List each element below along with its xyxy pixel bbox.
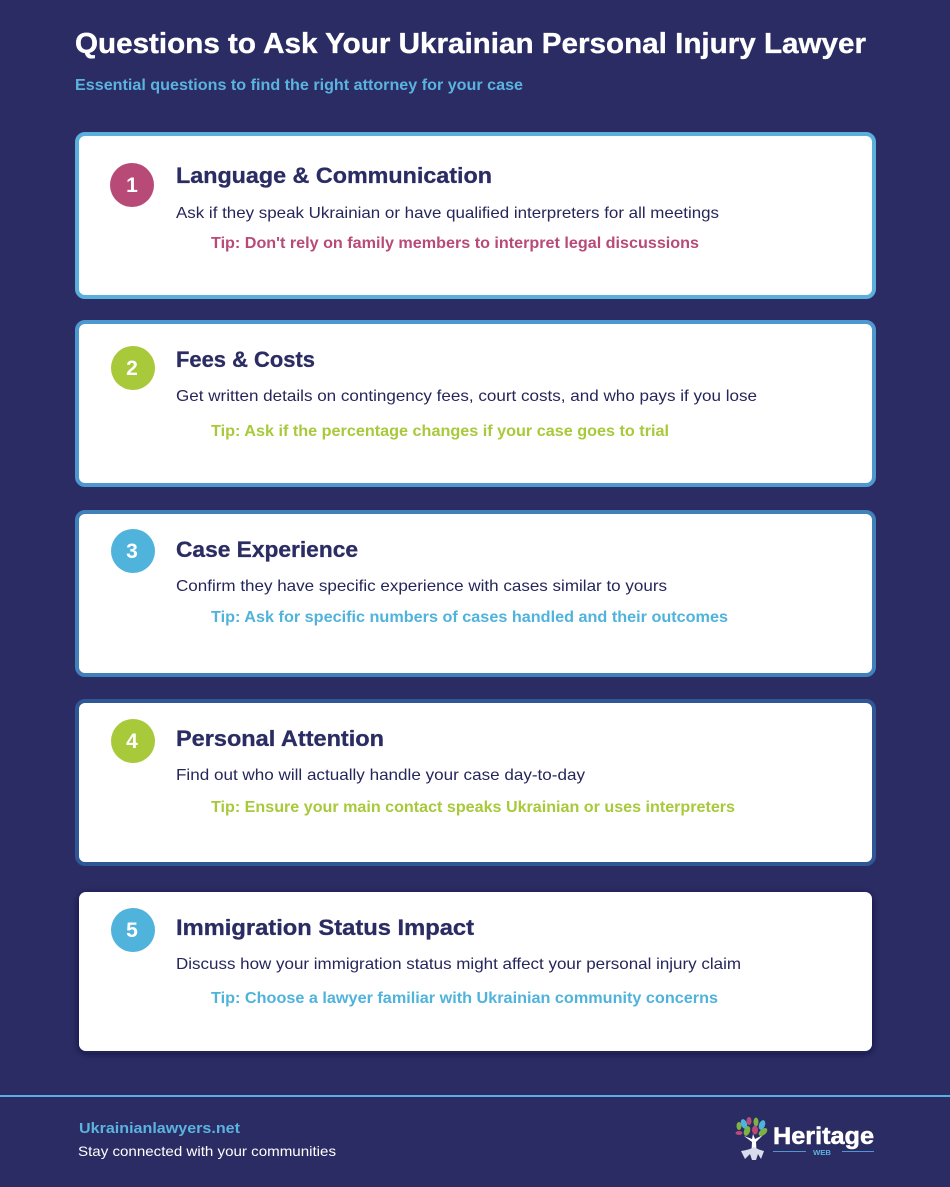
- panel: question 3 case experience: [77, 512, 874, 675]
- description 2: Get written details on contingency fees, court costs, and who pays if you lose: [176, 388, 757, 405]
- number badge 2: [111, 346, 155, 390]
- number badge 1: 1: [126, 174, 138, 197]
- panel: question 4 personal attention: [77, 701, 874, 864]
- description 3: Confirm they have specific experience with cases similar to yours: [176, 578, 667, 595]
- tip 2: Tip: Ask if the percentage changes if your case goes to trial: [211, 423, 669, 440]
- footer website: Ukrainianlawyers.net: [79, 1120, 240, 1137]
- panel: question 2 fees and costs: [77, 322, 874, 485]
- number badge 5: [111, 908, 155, 952]
- heading 5: Immigration Status Impact: [176, 915, 475, 940]
- description 5: Discuss how your immigration status might affect your personal injury claim: [176, 956, 741, 973]
- number badge 4: [111, 719, 155, 763]
- tip 4: Tip: Ensure your main contact speaks Ukrainian or uses interpreters: [211, 799, 735, 816]
- tip 3: Tip: Ask for specific numbers of cases handled and their outcomes: [211, 609, 728, 626]
- heading 2: Fees & Costs: [176, 347, 315, 372]
- icon: tree: [736, 1117, 769, 1160]
- description 4: Find out who will actually handle your case day-to-day: [176, 767, 585, 784]
- subtitle: Essential questions to find the right attorney for your case: [75, 77, 523, 94]
- number badge 5: 5: [126, 919, 138, 942]
- heading 3: Case Experience: [176, 537, 358, 562]
- panel: question 1 language and communication: [77, 134, 874, 297]
- description 1: Ask if they speak Ukrainian or have qualified interpreters for all meetings: [176, 205, 719, 222]
- tip 1: Tip: Don't rely on family members to interpret legal discussions: [211, 235, 699, 252]
- number badge 4: 4: [126, 730, 138, 753]
- footer tagline: Stay connected with your communities: [78, 1143, 336, 1159]
- title: Questions to Ask Your Ukrainian Personal Injury Lawyer: [75, 28, 866, 60]
- number badge 1: [110, 163, 154, 207]
- logo wordmark: Heritage: [773, 1123, 874, 1150]
- tip 5: Tip: Choose a lawyer familiar with Ukrainian community concerns: [211, 990, 718, 1007]
- logo: Heritage Web: [736, 1117, 874, 1160]
- heading 1: Language & Communication: [176, 163, 492, 188]
- panel: question 5 immigration status impact: [79, 892, 872, 1051]
- heading 4: Personal Attention: [176, 726, 384, 751]
- logo sub-label: WEB: [813, 1148, 832, 1157]
- number badge 3: [111, 529, 155, 573]
- number badge 2: 2: [126, 357, 138, 380]
- number badge 3: 3: [126, 540, 138, 563]
